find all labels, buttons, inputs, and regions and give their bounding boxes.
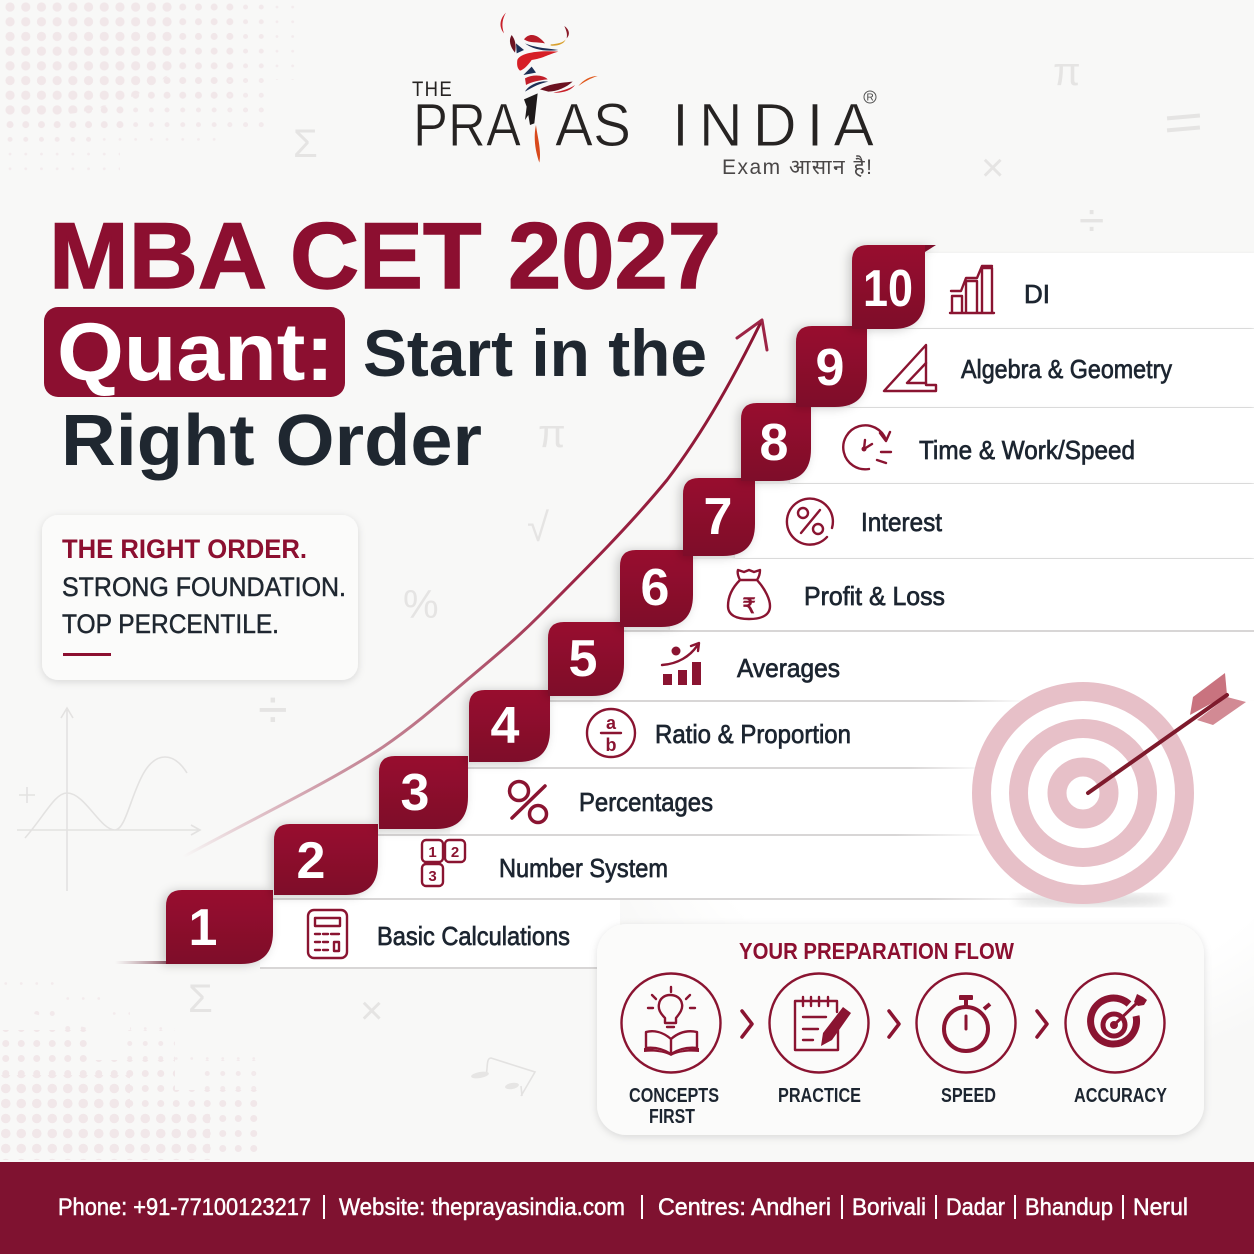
step 8: Time & Work/Speed — [919, 435, 1135, 465]
badge 2 — [274, 824, 378, 895]
badge 8: 8 — [760, 414, 788, 472]
icon: money bag — [728, 570, 770, 619]
step 7: Interest — [861, 507, 943, 537]
step 6 — [620, 550, 945, 627]
target — [982, 673, 1246, 906]
quant highlight: Quant: — [57, 307, 334, 398]
logo wordmark: PRA — [413, 91, 521, 159]
step 5 — [548, 622, 840, 696]
background: π — [538, 412, 566, 456]
icon: clock — [843, 425, 891, 469]
logo wordmark — [412, 78, 874, 159]
background: % — [403, 583, 439, 627]
badge 5 — [548, 622, 624, 696]
badge 3 — [379, 756, 468, 829]
title — [44, 203, 721, 481]
step 5: Averages — [737, 653, 840, 683]
badge 10 — [852, 245, 936, 329]
footer: Borivali — [852, 1194, 926, 1221]
step 3 — [379, 756, 713, 829]
badge 1 — [166, 890, 273, 964]
step 4 — [469, 690, 851, 762]
badge 4 — [469, 690, 550, 762]
footer: Centres: Andheri — [658, 1194, 831, 1221]
step: concepts first: FIRST — [649, 1106, 695, 1128]
icon: percent — [510, 782, 546, 822]
icon: bulb and book — [644, 987, 699, 1056]
badge 2: 2 — [297, 832, 325, 890]
step 1 — [166, 890, 570, 964]
icon: fraction — [587, 709, 635, 757]
badge 6 — [620, 550, 693, 627]
title: MBA CET 2027 — [49, 203, 721, 308]
arrow in target — [1088, 673, 1246, 793]
callout: TOP PERCENTILE. — [62, 609, 279, 639]
title: Start in the — [363, 316, 707, 390]
icon: money bag: ₹ — [742, 595, 756, 618]
badge 7 — [683, 478, 755, 556]
background: Σ — [293, 122, 318, 166]
icon: number blocks: 2 — [451, 844, 459, 861]
icon: DI chart — [950, 266, 994, 313]
footer: Phone: +91-77100123217 — [58, 1194, 311, 1221]
footer: Website: theprayasindia.com — [339, 1194, 625, 1221]
step: speed: SPEED — [941, 1085, 996, 1107]
callout: STRONG FOUNDATION. — [62, 572, 346, 602]
icon: fraction: a — [606, 713, 617, 733]
step 9: Algebra & Geometry — [961, 354, 1172, 384]
footer: Dadar — [946, 1194, 1005, 1221]
logo tagline: Exam आसान है! — [722, 155, 872, 179]
badge 3: 3 — [401, 764, 429, 822]
badge 7: 7 — [704, 488, 732, 546]
step 10: DI — [1024, 279, 1050, 309]
background: ÷ — [1079, 194, 1104, 246]
icon: notepad and pencil — [795, 997, 851, 1050]
step: speed — [916, 974, 1016, 1107]
step 9 — [796, 326, 1172, 407]
icon: target and dart — [1091, 994, 1147, 1044]
step 2: Number System — [499, 853, 668, 883]
callout — [42, 515, 358, 680]
badge 4: 4 — [491, 697, 520, 755]
background: ÷ — [258, 680, 288, 740]
ribbons — [115, 253, 1254, 969]
badge 9 — [796, 326, 867, 407]
callout: THE RIGHT ORDER. — [62, 534, 307, 564]
badge 1: 1 — [189, 899, 217, 957]
step 4: Ratio & Proportion — [655, 719, 851, 749]
logo — [412, 13, 876, 179]
step: concepts first: CONCEPTS — [629, 1085, 719, 1107]
step 3: Percentages — [579, 787, 713, 817]
step 10 — [852, 245, 1050, 329]
step 6: Profit & Loss — [804, 581, 945, 611]
icon: fraction: b — [606, 735, 616, 755]
logo wordmark: INDIA — [672, 91, 874, 159]
step: accuracy — [1066, 974, 1168, 1107]
icon: averages chart — [662, 643, 701, 685]
step: practice: PRACTICE — [778, 1085, 861, 1107]
footer — [0, 1162, 1254, 1254]
step 2 — [274, 824, 668, 895]
footer: Nerul — [1133, 1194, 1188, 1221]
chevron 3 — [1037, 1011, 1047, 1037]
icon: number blocks: 1 — [428, 844, 437, 861]
background: × — [981, 146, 1004, 190]
background: Σ — [188, 977, 213, 1021]
icon: stopwatch — [944, 995, 990, 1051]
chevron 2 — [889, 1011, 899, 1037]
step 8 — [741, 403, 1135, 481]
registered mark: R — [866, 92, 874, 104]
logo wordmark: AS — [555, 91, 631, 159]
badge 9: 9 — [816, 339, 844, 397]
icon: number blocks — [422, 840, 465, 886]
background: √ — [527, 506, 549, 550]
step 7 — [683, 478, 943, 556]
logo figure — [501, 13, 598, 163]
step: concepts first — [622, 974, 720, 1128]
badge 8 — [741, 403, 811, 481]
panel: preparation flow: YOUR PREPARATION FLOW — [739, 938, 1014, 964]
registered mark — [864, 91, 876, 104]
badge 6: 6 — [641, 559, 669, 617]
footer: Bhandup — [1025, 1194, 1113, 1221]
background: π — [1053, 50, 1081, 94]
step: accuracy: ACCURACY — [1074, 1085, 1168, 1107]
badge 10: 10 — [863, 260, 913, 318]
title: Right Order — [61, 401, 482, 481]
icon: calculator — [308, 910, 347, 958]
panel: preparation flow — [597, 924, 1204, 1135]
background: × — [360, 989, 383, 1033]
chevron 1 — [742, 1011, 752, 1037]
logo wordmark: THE — [412, 78, 453, 101]
badge 5: 5 — [569, 630, 597, 688]
icon: number blocks: 3 — [428, 868, 437, 885]
icon: set square — [884, 345, 936, 391]
growth curve arrow — [183, 320, 767, 857]
step 1: Basic Calculations — [377, 921, 570, 951]
icon: interest — [787, 499, 833, 545]
step: practice — [770, 974, 868, 1107]
